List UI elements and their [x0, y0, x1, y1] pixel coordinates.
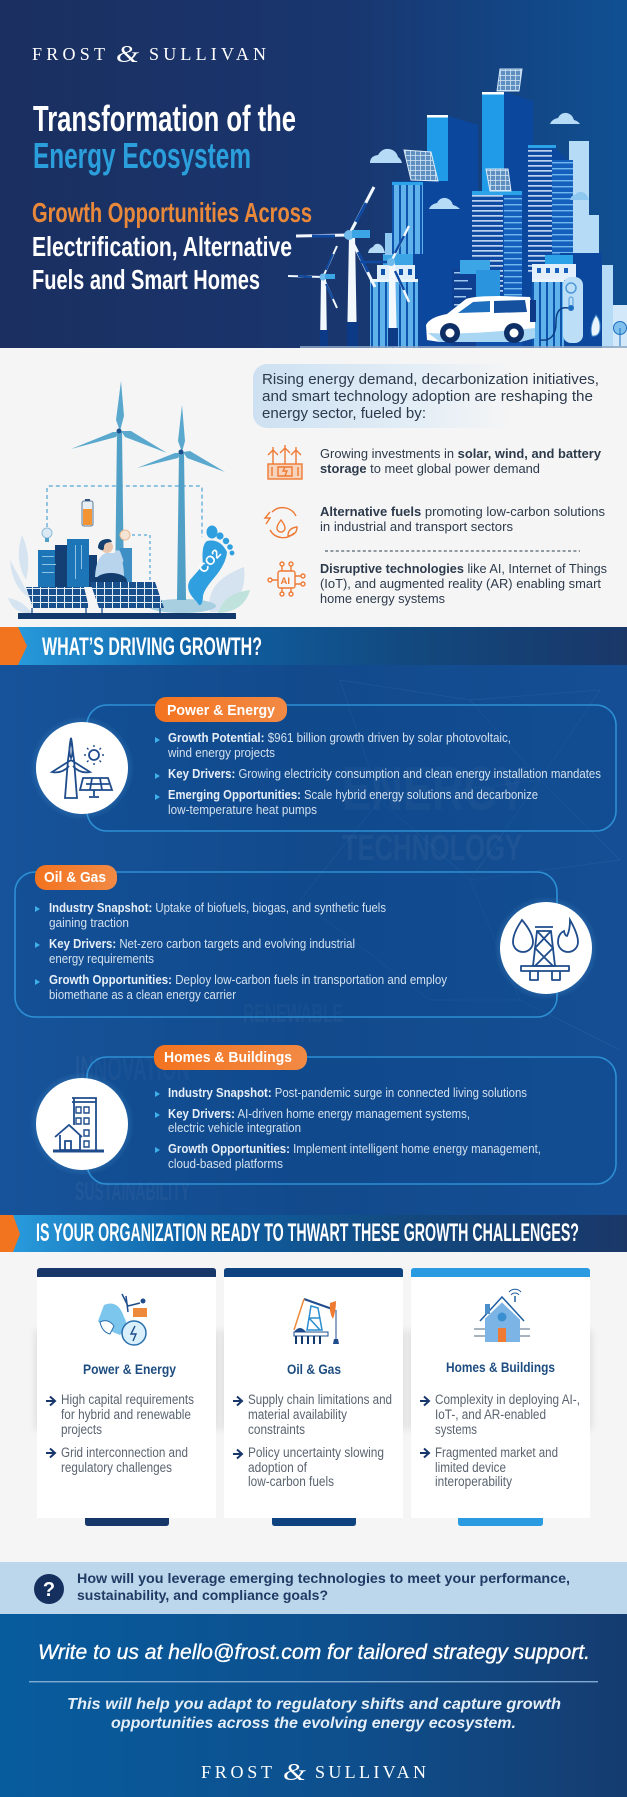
- supporting text: opportunities across the evolving energy ecosystem.: [111, 1715, 516, 1732]
- card: homes and buildings: [411, 1268, 590, 1526]
- bullet list: energy requirements: [49, 952, 154, 966]
- heading pill: [155, 697, 287, 722]
- clouds: [368, 113, 589, 253]
- subtitle: Fuels and Smart Homes: [32, 264, 260, 295]
- driver: disruptive technologies: Disruptive technologies like AI, Internet of Things: [320, 561, 607, 576]
- icon: energy mix: [98, 1294, 147, 1345]
- icon: smart house: [474, 1289, 530, 1342]
- panel: what's driving growth: RENEWABLE: [243, 998, 343, 1028]
- question text: How will you leverage emerging technologies to meet your performance,: [77, 1570, 570, 1586]
- driver: solar, wind and battery: storage to meet global power demand: [320, 461, 540, 476]
- panel: footer call to action: [0, 1614, 627, 1797]
- illustration: turbines, solar panels and CO2 footprint: [8, 381, 250, 619]
- bullet list: biomethane as a clean energy carrier: [49, 988, 236, 1002]
- heading: Homes & Buildings: [446, 1359, 555, 1375]
- icon: oil drop, rig and flame: [494, 896, 598, 1000]
- challenge list: Complexity in deploying AI-,: [435, 1392, 580, 1407]
- buildings: [38, 539, 132, 587]
- small turbine: [137, 405, 225, 600]
- bullet list: Growth Potential: $961 billion growth driven by solar photovoltaic,: [168, 731, 511, 745]
- title: Transformation of the: [33, 98, 296, 139]
- challenge list: [46, 1392, 194, 1475]
- bullet list: [155, 1086, 541, 1171]
- section banner: What's driving growth: [0, 627, 627, 665]
- challenge list: limited device: [435, 1460, 506, 1475]
- icon: power grid: [268, 445, 302, 479]
- panel: what's driving growth: ENERGY: [342, 755, 527, 824]
- trees: [591, 315, 626, 346]
- supporting text: [67, 1696, 561, 1732]
- card: power and energy: [37, 1268, 216, 1526]
- icon: pump jack: [294, 1299, 339, 1344]
- icon: fuel cycle: [265, 508, 297, 538]
- logo: Frost & Sullivan: [32, 42, 266, 68]
- logo: Frost & Sullivan: [201, 1760, 426, 1786]
- challenge list: projects: [61, 1422, 102, 1437]
- bullet list: low-temperature heat pumps: [168, 803, 317, 817]
- bullet list: cloud-based platforms: [168, 1157, 283, 1171]
- EV charger: [540, 277, 583, 343]
- logo: Frost & Sullivan: FROST: [32, 44, 105, 64]
- icon: apartment and house: [30, 1072, 134, 1176]
- challenge list: Grid interconnection and: [61, 1445, 188, 1460]
- person with laptop: [95, 539, 127, 589]
- logo: Frost & Sullivan: &: [116, 42, 139, 68]
- callout: intro statement: energy sector, fueled by:: [262, 405, 426, 422]
- panel: introduction section: [0, 348, 627, 627]
- bullet list: [155, 731, 601, 817]
- subtitle: Electrification, Alternative: [32, 231, 292, 262]
- big turbine: [71, 381, 167, 590]
- bullet list: Key Drivers: AI-driven home energy management systems,: [168, 1107, 470, 1121]
- challenge list: adoption of: [248, 1460, 307, 1475]
- panel: what's driving growth: SUSTAINABILITY: [75, 1176, 190, 1206]
- callout: intro statement: and smart technology adoption are reshaping the: [262, 388, 593, 405]
- challenge list: High capital requirements: [61, 1392, 194, 1407]
- panel: growth challenges: [0, 1215, 627, 1562]
- challenge list: constraints: [248, 1422, 305, 1437]
- subtitle: Growth Opportunities Across: [32, 197, 312, 228]
- panel: power and energy: [30, 697, 616, 831]
- driver: solar, wind and battery: [268, 445, 602, 479]
- challenge list: systems: [435, 1422, 477, 1437]
- supporting text: This will help you adapt to regulatory shifts and capture growth: [67, 1696, 561, 1713]
- bullet list: Industry Snapshot: Uptake of biofuels, biogas, and synthetic fuels: [49, 901, 386, 915]
- heading pill: Homes & Buildings: [164, 1049, 292, 1066]
- bulb: [42, 528, 52, 542]
- challenge list: Policy uncertainty slowing: [248, 1445, 384, 1460]
- subtitle: [32, 197, 312, 295]
- panel: what's driving growth: [0, 627, 627, 1215]
- logo: Frost & Sullivan: SULLIVAN: [149, 44, 266, 64]
- challenge list: regulatory challenges: [61, 1460, 172, 1475]
- icon: AI chip: AI: [280, 576, 290, 587]
- callout: intro statement: [253, 364, 599, 428]
- wind turbines: [288, 187, 409, 348]
- CO2 footprint: CO2: [195, 546, 224, 576]
- title: Energy Ecosystem: [33, 135, 251, 176]
- title: [33, 98, 296, 176]
- heading pill: Oil & Gas: [44, 869, 106, 886]
- bullet list: wind energy projects: [167, 746, 275, 760]
- driver: disruptive technologies: home energy systems: [320, 591, 445, 606]
- logo: Frost & Sullivan: &: [283, 1760, 306, 1786]
- driver: alternative fuels: in industrial and transport sectors: [320, 519, 514, 534]
- question text: sustainability, and compliance goals?: [77, 1587, 328, 1603]
- bullet list: [35, 901, 448, 1002]
- challenge list: Supply chain limitations and: [248, 1392, 392, 1407]
- panel: header: [0, 0, 627, 348]
- challenge list: interoperability: [435, 1474, 512, 1489]
- heading pill: [35, 865, 117, 890]
- callout: intro statement: Rising energy demand, decarbonization initiatives,: [262, 371, 599, 388]
- icon: question mark: ?: [43, 1579, 55, 1601]
- electric car: [426, 296, 536, 343]
- illustration: smart city with turbines and electric car: [288, 69, 627, 348]
- bullet list: Key Drivers: Growing electricity consumption and clean energy installation mandates: [168, 767, 601, 781]
- panel: what's driving growth: TECHNOLOGY: [342, 827, 522, 868]
- panel: oil and gas: [15, 865, 598, 1017]
- driver: disruptive technologies: (IoT), and augmented reality (AR) enabling smart: [320, 576, 601, 591]
- bullet list: electric vehicle integration: [168, 1121, 301, 1135]
- challenge list: low-carbon fuels: [248, 1474, 334, 1489]
- solar panels on rooftops: [497, 69, 522, 91]
- challenge list: [420, 1392, 580, 1489]
- driver: alternative fuels: [265, 504, 605, 538]
- call to action: Write to us at hello@frost.com for tailored strategy support.: [38, 1641, 590, 1664]
- driver: alternative fuels: Alternative fuels promoting low-carbon solutions: [320, 504, 605, 519]
- icon: AI chip: [268, 562, 305, 596]
- panel: question band: [0, 1562, 627, 1614]
- CO2 footprint: [188, 526, 234, 605]
- question text: [77, 1570, 570, 1603]
- heading pill: [154, 1045, 307, 1070]
- driver: disruptive technologies: [268, 561, 607, 606]
- challenge list: for hybrid and renewable: [61, 1407, 191, 1422]
- bullet list: Emerging Opportunities: Scale hybrid energy solutions and decarbonize: [168, 788, 538, 802]
- card: oil and gas: [224, 1268, 403, 1526]
- challenge list: IoT-, and AR-enabled: [435, 1407, 546, 1422]
- bullet list: Key Drivers: Net-zero carbon targets and evolving industrial: [49, 937, 355, 951]
- heading: Oil & Gas: [287, 1361, 341, 1377]
- heading pill: Power & Energy: [167, 702, 276, 719]
- challenge list: material availability: [248, 1407, 347, 1422]
- icon: question mark: [34, 1574, 64, 1604]
- battery: [82, 499, 93, 526]
- bullet list: Growth Opportunities: Deploy low-carbon fuels in transportation and employ: [49, 973, 448, 987]
- heading: Power & Energy: [83, 1361, 176, 1377]
- panel: what's driving growth: INNOVATION: [75, 1050, 190, 1088]
- driver: solar, wind and battery: Growing investments in solar, wind, and battery: [320, 446, 602, 461]
- bullet list: Industry Snapshot: Post-pandemic surge in connected living solutions: [168, 1086, 527, 1100]
- solar panels: [26, 587, 89, 608]
- icon: turbine and solar panel: [30, 716, 134, 820]
- challenge list: Fragmented market and: [435, 1445, 558, 1460]
- bullet list: gaining traction: [49, 916, 129, 930]
- panel: homes and buildings: [30, 1045, 616, 1184]
- challenge list: [233, 1392, 392, 1489]
- logo: Frost & Sullivan: SULLIVAN: [315, 1762, 426, 1782]
- section banner: What's driving growth: WHAT’S DRIVING GROWTH?: [42, 633, 262, 661]
- logo: Frost & Sullivan: FROST: [201, 1762, 272, 1782]
- bullet list: Growth Opportunities: Implement intelligent home energy management,: [168, 1142, 541, 1156]
